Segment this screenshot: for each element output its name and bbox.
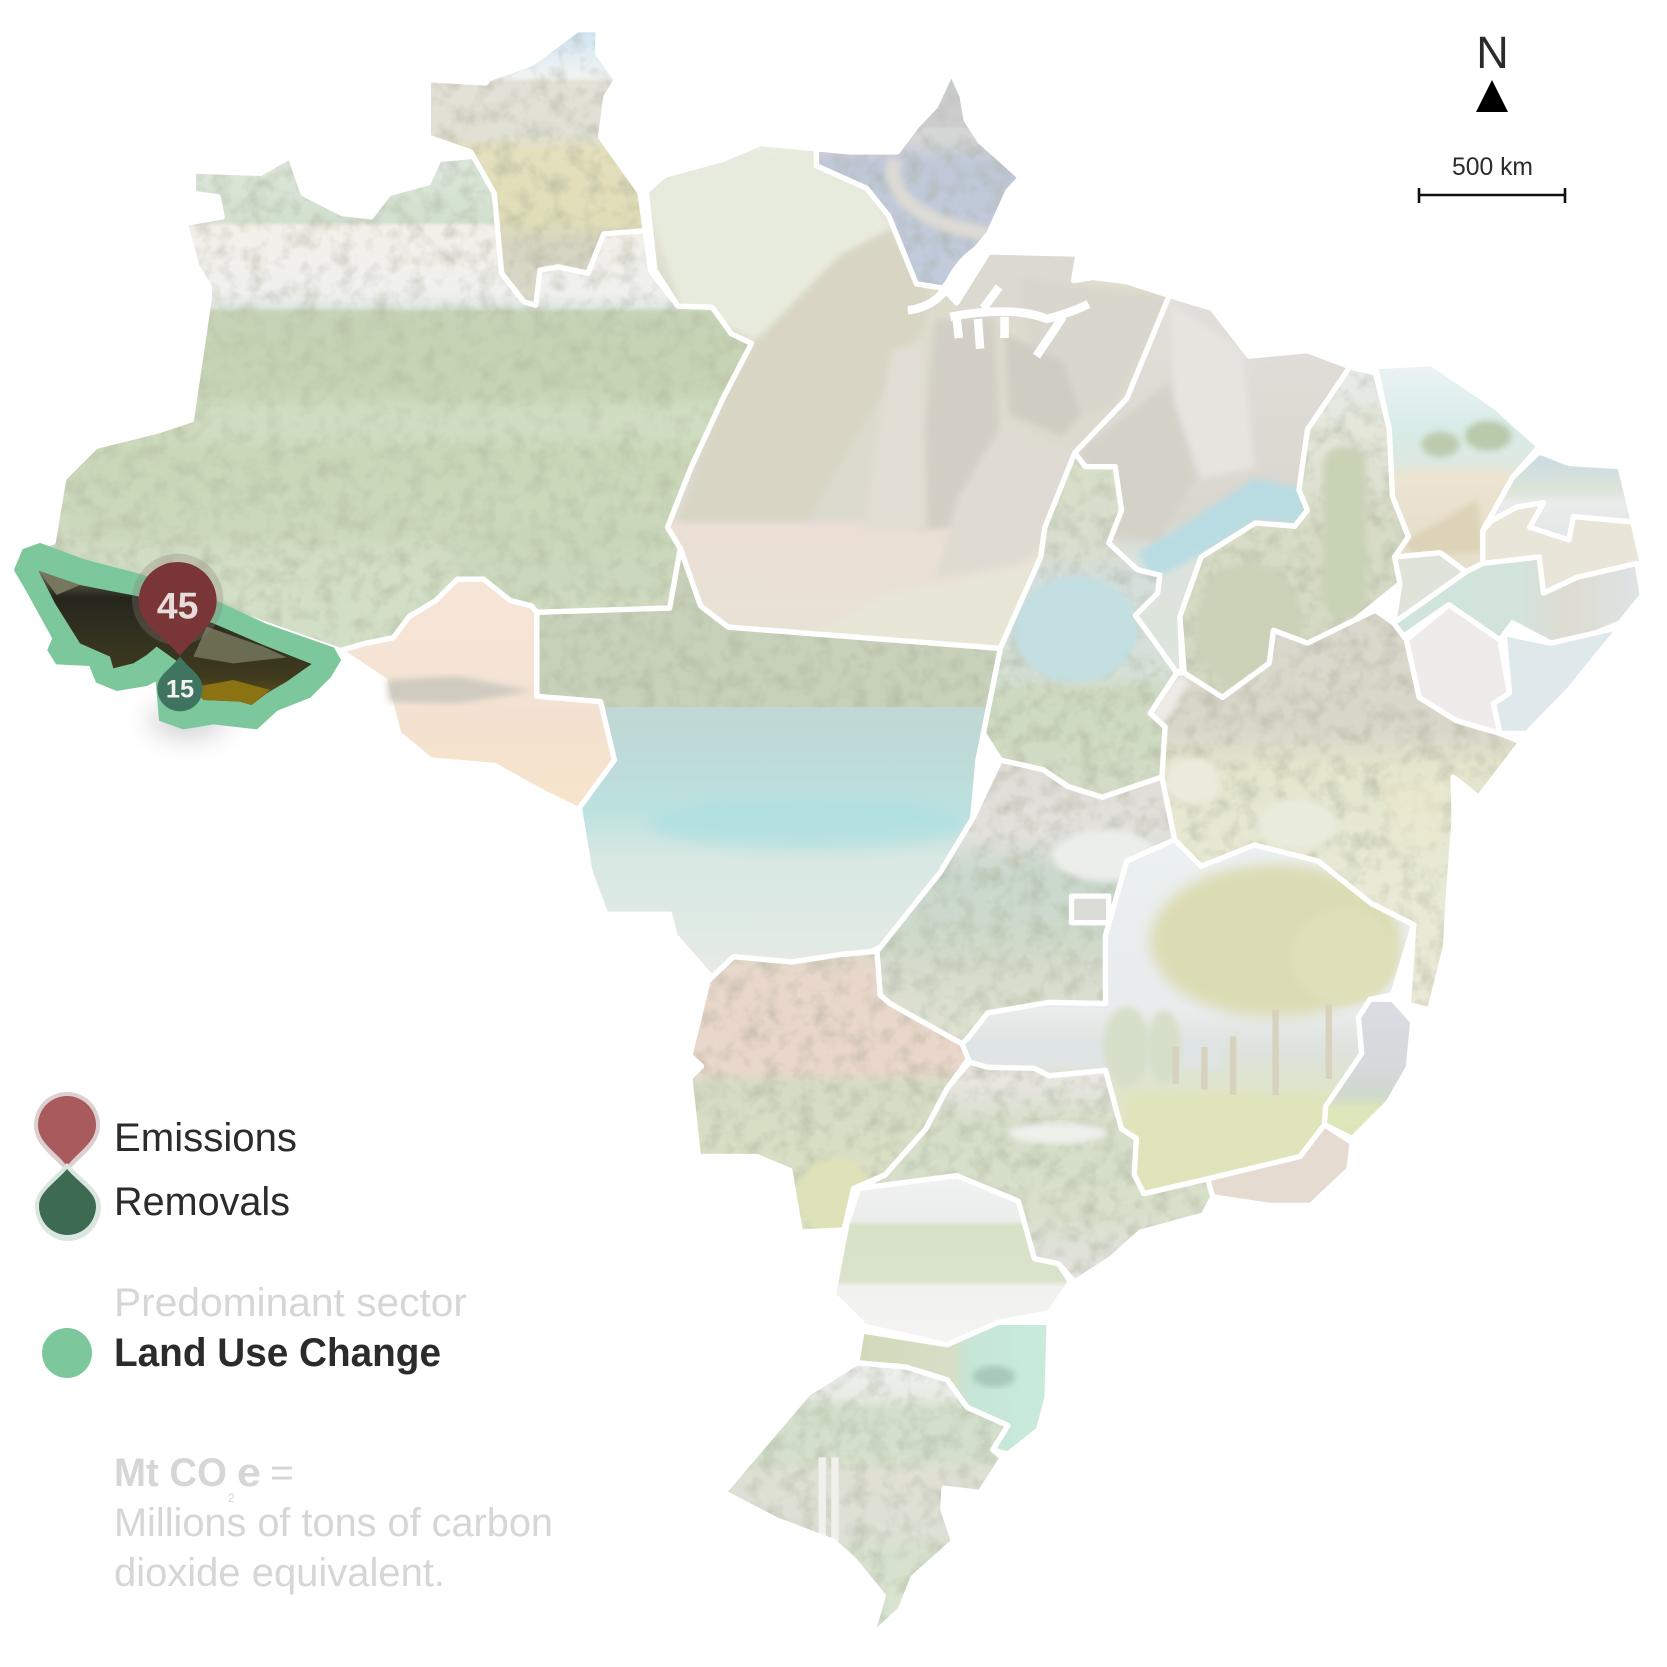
- legend: removals label: Removals: [114, 1180, 290, 1224]
- scale bar: [1419, 153, 1565, 203]
- north arrow: [1476, 27, 1509, 112]
- legend: removals pin: [35, 1163, 101, 1241]
- pin: removals 15: [157, 657, 203, 711]
- note: Mt CO2e definition: e: [237, 1451, 261, 1495]
- state: Goias: [877, 760, 1175, 1044]
- note: Mt CO2e definition: [114, 1451, 553, 1595]
- state: Minas Gerais with tree photo: [962, 840, 1414, 1194]
- state: Sao Paulo: [859, 1062, 1213, 1282]
- state: Rio de Janeiro: [1208, 1125, 1352, 1205]
- note: Mt CO2e definition: Millions of tons of carbon: [114, 1501, 553, 1545]
- state: Rio Grande do Sul: [724, 1363, 1008, 1636]
- state: cloud patch: [1406, 605, 1509, 733]
- state: Parana with waterfall: [833, 1176, 1070, 1345]
- state: Santa Catarina: [857, 1322, 1049, 1454]
- state: Piaui with cactus: [1180, 367, 1408, 697]
- note: Mt CO2e definition: 2: [228, 1491, 235, 1505]
- state: Alagoas city patch: [1394, 553, 1466, 623]
- note: Mt CO2e definition: =: [270, 1451, 294, 1495]
- state: Amazonas: [27, 156, 752, 651]
- legend: land use change label: Land Use Change: [114, 1331, 441, 1375]
- state: Roraima: [428, 30, 645, 305]
- state: Pernambuco coast: [1394, 557, 1642, 643]
- Acre burning forest photo: [38, 571, 312, 705]
- state: Distrito Federal: [1072, 896, 1109, 923]
- state: Ceara with palms: [1376, 364, 1539, 572]
- state: Rio Grande do Norte: [1483, 452, 1637, 540]
- legend: emissions pin: [34, 1092, 100, 1172]
- state: Maranhao: [1075, 296, 1350, 673]
- state: Espirito Santo: [1324, 999, 1413, 1138]
- state: Mato Grosso do Sul: [690, 951, 969, 1233]
- state: Sergipe coast: [1494, 627, 1620, 733]
- state: Rondonia: [340, 579, 614, 810]
- scale bar: 500 km: [1452, 153, 1533, 181]
- state: Acre highlight: [15, 544, 340, 728]
- legend: predominant sector heading: Predominant sector: [114, 1281, 467, 1325]
- pin: emissions 45: 45: [157, 584, 198, 626]
- note: Mt CO2e definition: Mt CO: [114, 1451, 227, 1495]
- north arrow: N: [1476, 27, 1509, 78]
- state: Paraiba strip: [1483, 503, 1642, 593]
- legend: land use change swatch: [42, 1328, 92, 1378]
- state: Bahia: [1148, 610, 1521, 1010]
- pin: removals 15: 15: [166, 675, 194, 703]
- Acre green sector outline: [15, 544, 340, 728]
- state: Mato Grosso with water photo: [537, 547, 1005, 978]
- legend: emissions label: Emissions: [114, 1116, 297, 1160]
- state: Amapa with acai berries: [816, 72, 1020, 288]
- state: Tocantins: [983, 453, 1177, 797]
- state: Para with tree photo: [643, 144, 1169, 648]
- Marajo island white river lacework: [908, 240, 1089, 356]
- shadow under Acre: [150, 704, 226, 736]
- pin: emissions 45: [132, 554, 223, 656]
- note: Mt CO2e definition: dioxide equivalent.: [114, 1551, 445, 1595]
